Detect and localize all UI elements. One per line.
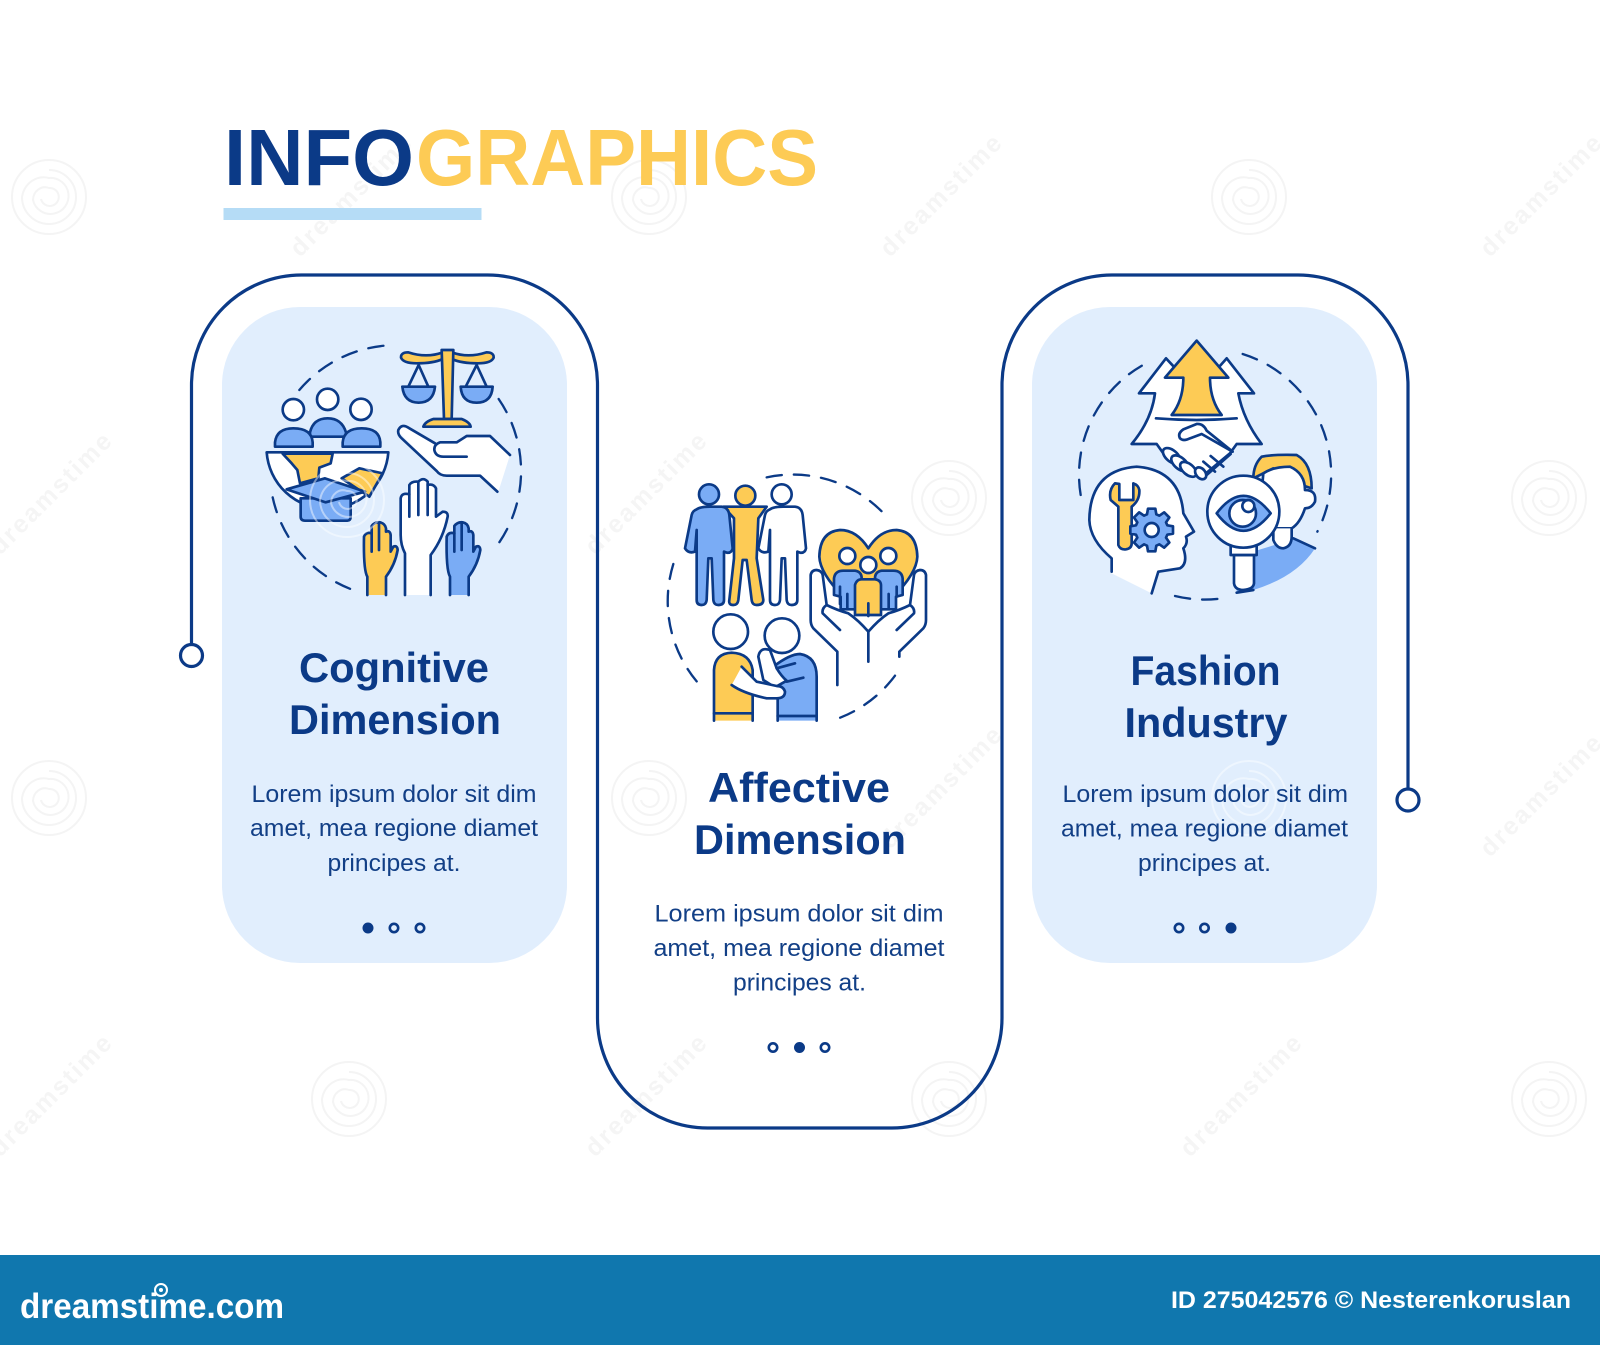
text: fashion industry: Industry — [1124, 699, 1288, 746]
pagination dots: cognitive — [364, 924, 424, 932]
text: fashion industry: Lorem ipsum dolor sit dim — [1062, 781, 1348, 808]
text: fashion industry: Fashion — [1130, 647, 1280, 694]
text: affective dimension — [654, 764, 945, 996]
watermark: dreamstime — [874, 721, 1007, 854]
pagination dots: affective — [769, 1043, 829, 1052]
title — [224, 113, 818, 202]
connecting outline — [180, 275, 1419, 1128]
text: affective dimension: Dimension — [694, 816, 906, 863]
watermark: dreamstime — [579, 427, 712, 560]
text: cognitive dimension: principes at. — [328, 850, 460, 877]
panel background: cognitive — [222, 307, 567, 963]
watermark: dreamstime — [874, 129, 1007, 262]
icon part: hugging people — [713, 614, 817, 721]
pagination dots: fashion — [1175, 924, 1235, 932]
text: cognitive dimension: Cognitive — [299, 644, 489, 691]
title underline — [224, 208, 482, 220]
text: cognitive dimension — [250, 644, 538, 877]
footer logo: dreamstime.com — [20, 1287, 284, 1326]
icon part: heart family in hands — [811, 530, 926, 685]
text: affective dimension: Lorem ipsum dolor sit dim — [654, 900, 944, 928]
icon: affective dimension — [668, 475, 926, 721]
icon part: head with tools — [1089, 467, 1194, 593]
footer bar — [0, 1255, 1600, 1345]
text: fashion industry: amet, mea regione diamet — [1061, 816, 1348, 842]
text: affective dimension: principes at. — [733, 970, 866, 996]
icon part: raised hands — [364, 479, 480, 595]
watermark: dreamstime — [1174, 1029, 1307, 1162]
title: INFO — [224, 113, 414, 202]
footer credit: ID 275042576 © Nesterenkoruslan — [1171, 1287, 1571, 1314]
icon part: globe and cap — [267, 452, 388, 521]
icon part: three people — [685, 484, 806, 605]
text: cognitive dimension: Dimension — [289, 696, 501, 743]
icon part: person with magnifier — [1207, 455, 1315, 593]
icon part: scales — [401, 350, 494, 427]
icon part: people — [275, 389, 380, 447]
watermark — [0, 129, 1600, 1162]
text: fashion industry: principes at. — [1138, 850, 1271, 877]
watermark: dreamstime — [284, 129, 417, 262]
text: affective dimension: Affective — [708, 764, 890, 811]
icon part: open hand — [398, 426, 510, 492]
text: fashion industry — [1061, 647, 1348, 877]
panel watermarks — [310, 463, 1286, 835]
text: cognitive dimension: Lorem ipsum dolor sit dim — [252, 781, 536, 808]
icon: cognitive dimension — [267, 345, 521, 595]
title: GRAPHICS — [416, 113, 818, 202]
icon part: arrows — [1132, 341, 1262, 478]
icon part: handshake — [1160, 424, 1233, 481]
icon: fashion industry — [1079, 341, 1331, 600]
text: cognitive dimension: amet, mea regione diamet — [250, 815, 538, 842]
panel background: fashion — [1032, 307, 1377, 963]
text: affective dimension: amet, mea regione diamet — [654, 935, 945, 962]
watermark: dreamstime — [579, 1029, 712, 1162]
